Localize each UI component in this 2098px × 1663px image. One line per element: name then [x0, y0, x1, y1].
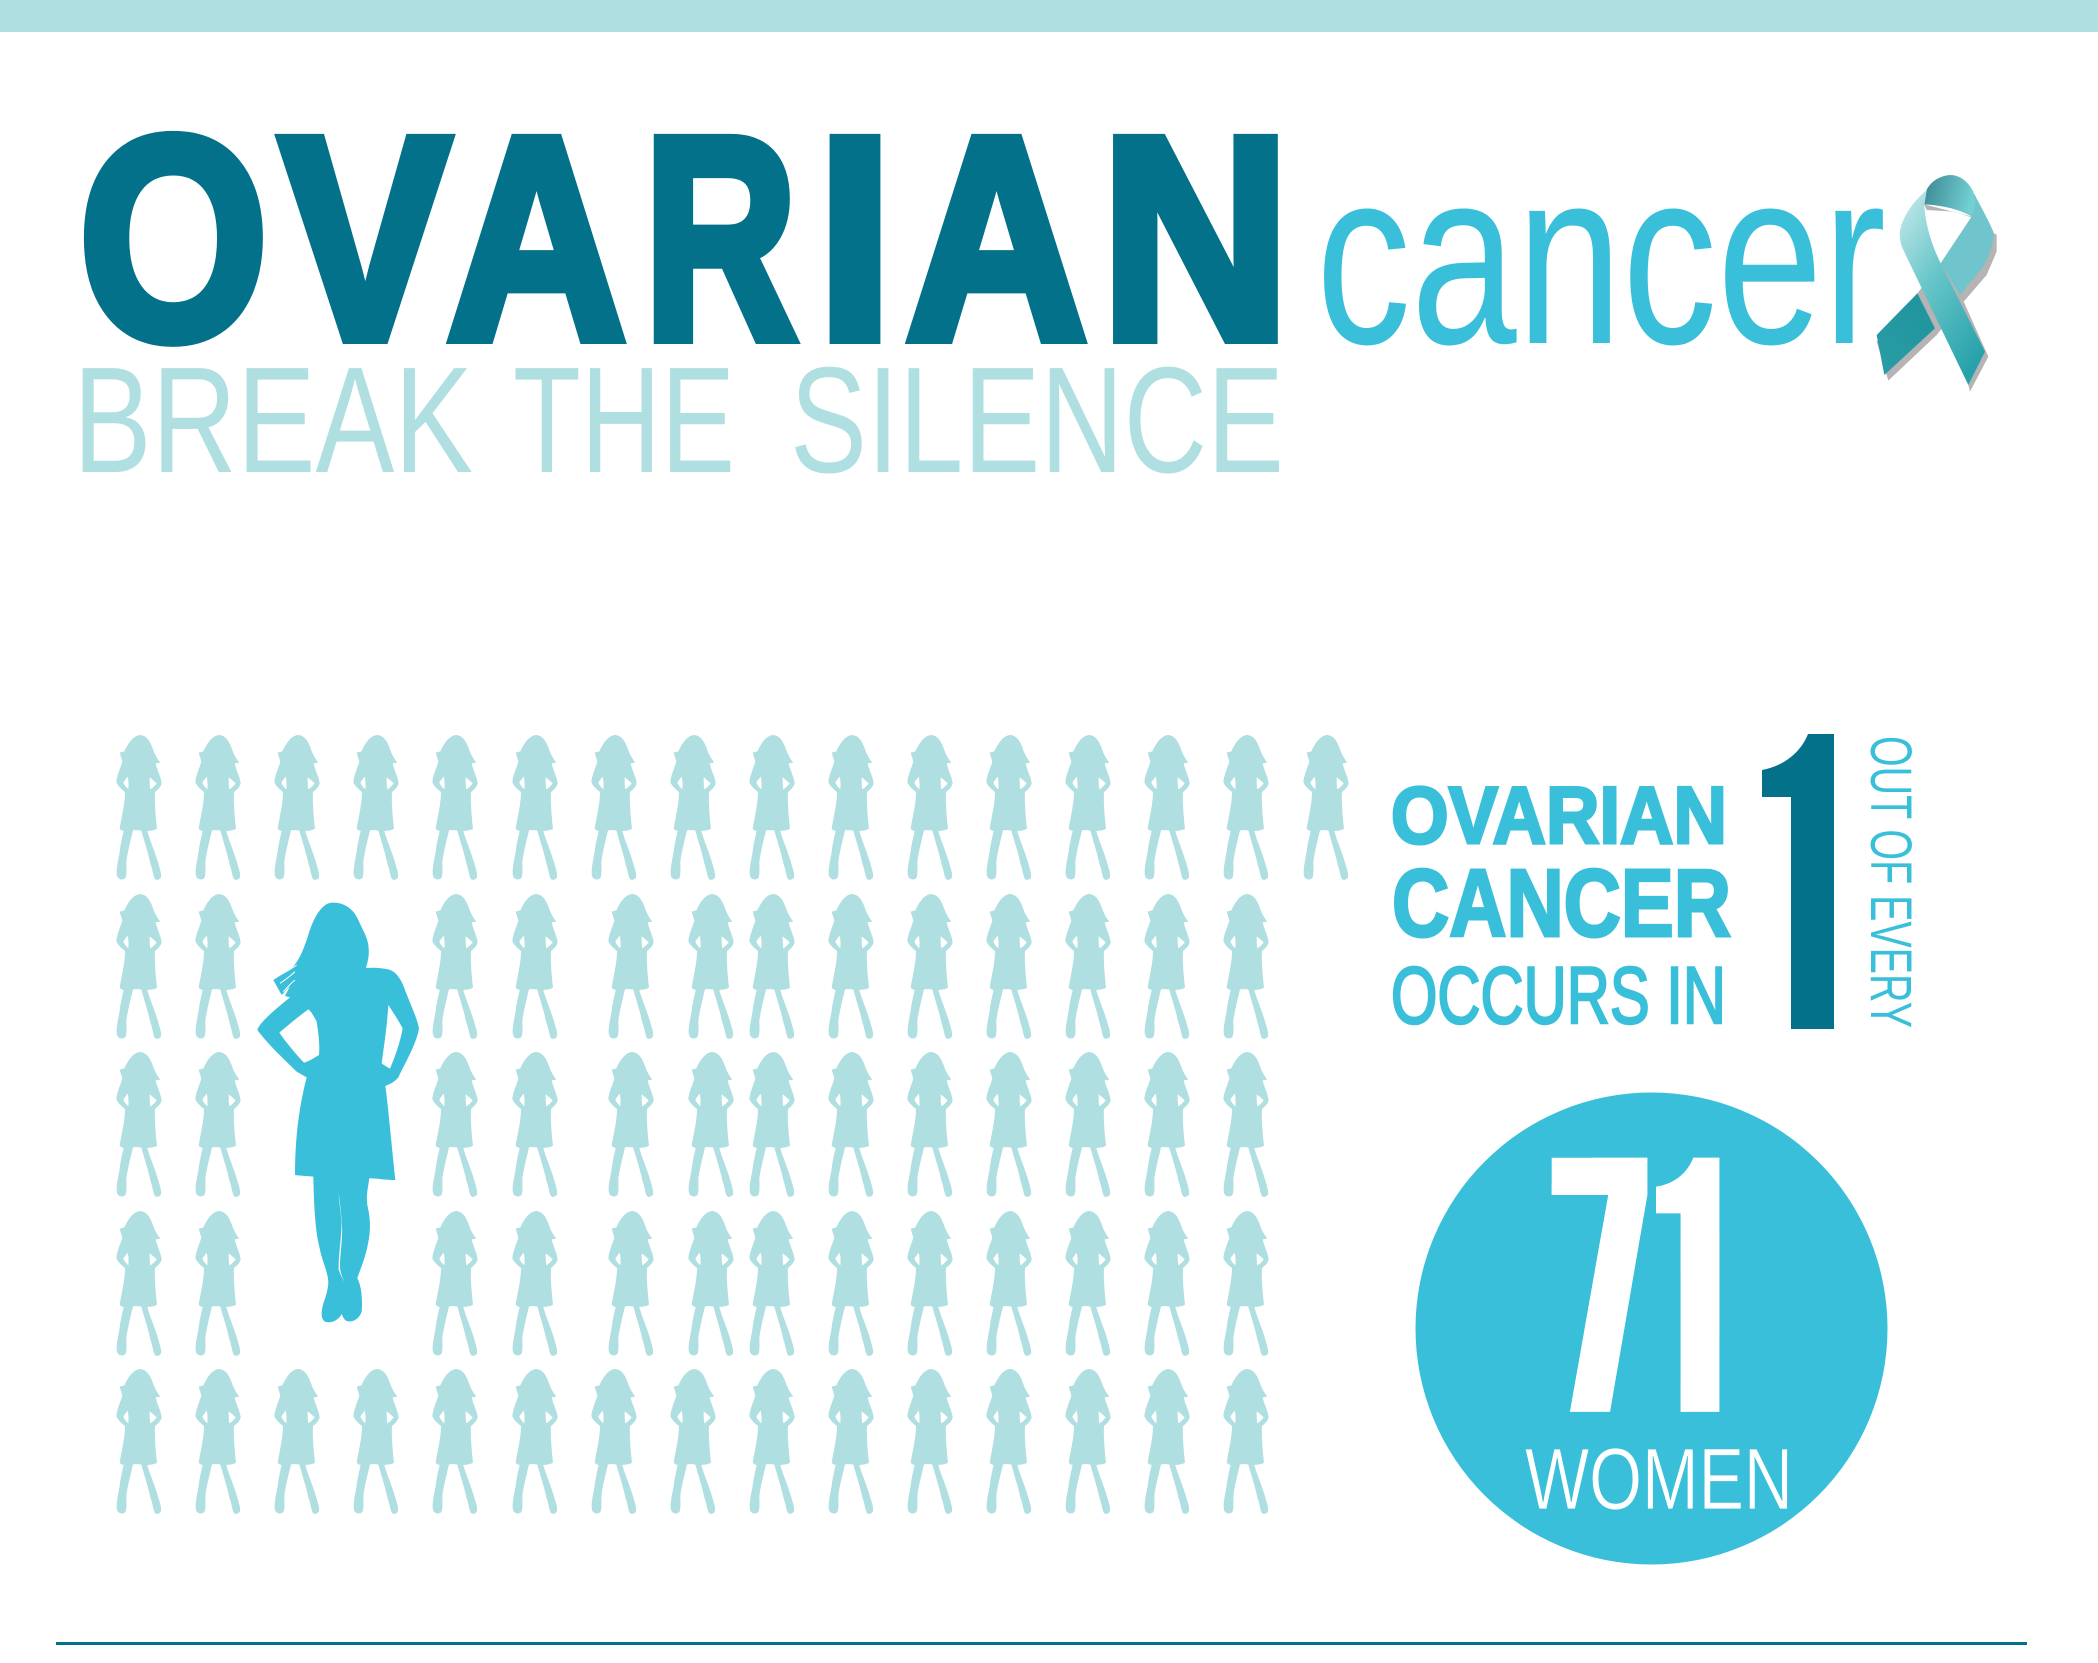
- big numeral 1: 1: [1715, 757, 1881, 1093]
- icon: large highlighted woman: [257, 903, 419, 1322]
- subtitle: SILENCE: [790, 335, 1284, 504]
- number 71: 71: [1490, 1178, 1780, 1468]
- icon: awareness ribbon: [1877, 175, 1997, 392]
- title: OVARIAN: A: [447, 78, 626, 400]
- row 4 of small women: [116, 1211, 1269, 1356]
- subtitle: BREAK: [73, 335, 473, 504]
- title: OVARIAN: A: [906, 78, 1087, 400]
- top band: [0, 0, 2098, 32]
- row 5 of small women: [116, 1369, 1269, 1514]
- text: WOMEN: WOMEN: [1525, 1431, 1793, 1528]
- row 2 of small women: [116, 894, 1269, 1039]
- title: OVARIAN: O: [79, 78, 268, 400]
- title: cancer: cancer: [1316, 117, 1886, 396]
- circle: [1416, 1092, 1888, 1564]
- text: OCCURS IN: OCCURS IN: [1391, 951, 1726, 1041]
- title: OVARIAN: N: [1101, 78, 1290, 400]
- statistic text block: [1391, 771, 1731, 1041]
- title: OVARIAN: I: [817, 78, 893, 400]
- circle callout: 71 women: [1416, 1092, 1888, 1564]
- bottom rule: [56, 1642, 2027, 1645]
- title: OVARIAN: V: [280, 78, 451, 400]
- text: CANCER: CANCER: [1392, 850, 1731, 957]
- row 3 of small women: [116, 1052, 1269, 1197]
- pictogram: 71 women: [116, 735, 1349, 1514]
- rotated text: OUT OF EVERY: OUT OF EVERY: [1858, 736, 1923, 1028]
- title: OVARIAN: R: [644, 78, 797, 400]
- row 1 of small women: [116, 735, 1349, 880]
- subtitle: THE: [513, 335, 735, 504]
- text: OVARIAN: OVARIAN: [1391, 771, 1727, 861]
